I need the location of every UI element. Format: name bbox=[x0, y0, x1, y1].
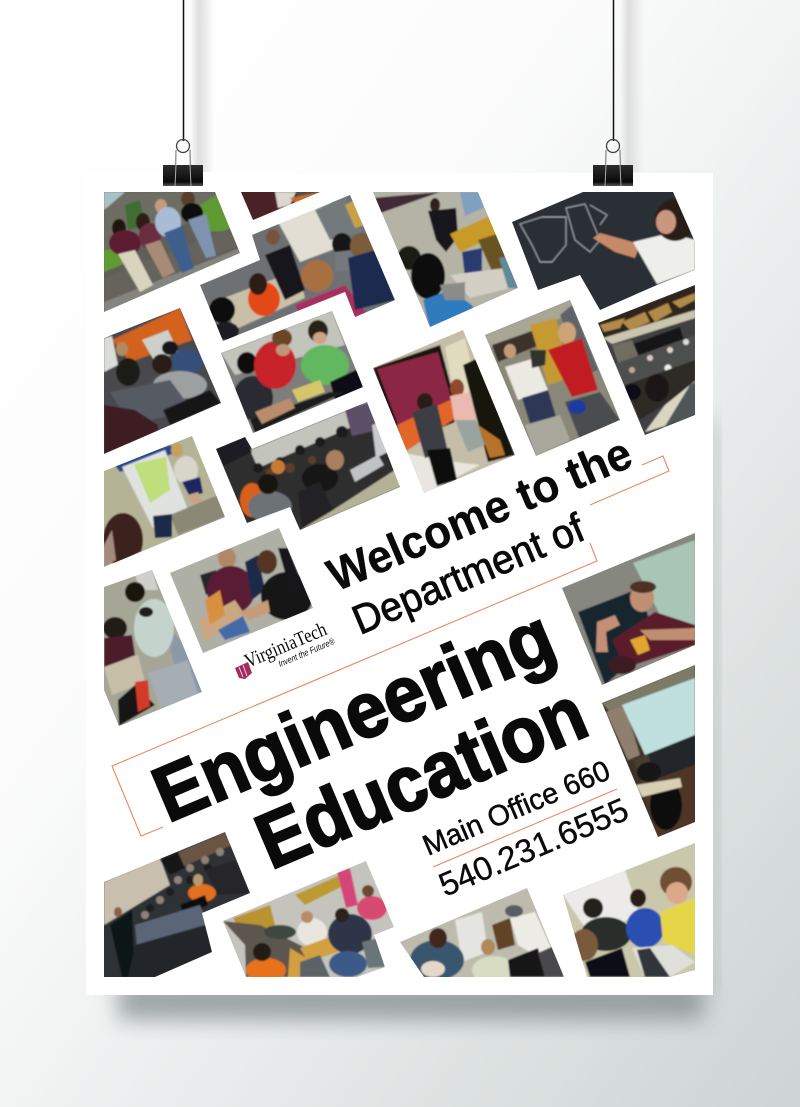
photo: lecture hall bbox=[596, 284, 696, 436]
photo: full classroom bbox=[214, 400, 404, 532]
text: Main Office 660: Main Office 660 bbox=[418, 755, 615, 862]
photo: round-table workshop bbox=[220, 859, 398, 982]
orange outline frame for Department and title bbox=[112, 543, 597, 836]
title: Education: Education bbox=[243, 668, 599, 886]
photo: smiling student in yellow bbox=[560, 841, 697, 979]
photo: instructor gesturing bbox=[560, 531, 697, 687]
photo: orange room table group bbox=[104, 308, 221, 454]
photo: group seated outside bbox=[100, 190, 245, 315]
title: Engineering: Engineering bbox=[140, 591, 567, 839]
photo: Engineering Education poster display bbox=[370, 328, 518, 496]
photo: two women with project bbox=[168, 526, 316, 656]
photo: students huddled at laptop bbox=[400, 888, 564, 977]
photo: demonstration in red shirt bbox=[482, 298, 624, 458]
logo tagline: Invent the Future® bbox=[277, 636, 336, 669]
hanging string and clip right bbox=[593, 0, 633, 186]
string shadow left bbox=[190, 0, 214, 172]
heading: Department of: Department of bbox=[346, 504, 591, 643]
photo: classroom discussion bbox=[198, 193, 398, 343]
logo wordmark: VirginiaTech bbox=[241, 618, 330, 673]
poster side shadow right bbox=[700, 420, 718, 990]
photo: whiteboard with sticky notes bbox=[102, 434, 227, 569]
Virginia Tech logo bbox=[235, 618, 336, 679]
text: phone number: 540.231.6555 bbox=[433, 790, 634, 903]
photo: projector screen lecture bbox=[600, 663, 697, 839]
hanging string and clip left bbox=[163, 0, 203, 186]
heading: Welcome to the: Welcome to the bbox=[320, 426, 639, 601]
icon: maroon shield bbox=[235, 662, 252, 679]
orange divider between room and phone bbox=[433, 789, 617, 867]
photo: students with laptop bbox=[218, 309, 366, 435]
orange outline frame for Welcome heading bbox=[590, 456, 669, 505]
photo: students with project tray bbox=[102, 568, 204, 728]
poster sheet bbox=[86, 173, 713, 995]
poster drop shadow bottom bbox=[118, 980, 704, 1020]
photo: instructor at blackboard bbox=[510, 190, 700, 315]
photo: lecture hall with instructor bbox=[102, 830, 252, 980]
photo: top fragment maroon bbox=[241, 192, 320, 220]
photo: presenter with laptops bbox=[370, 190, 520, 330]
string shadow right bbox=[620, 0, 644, 172]
